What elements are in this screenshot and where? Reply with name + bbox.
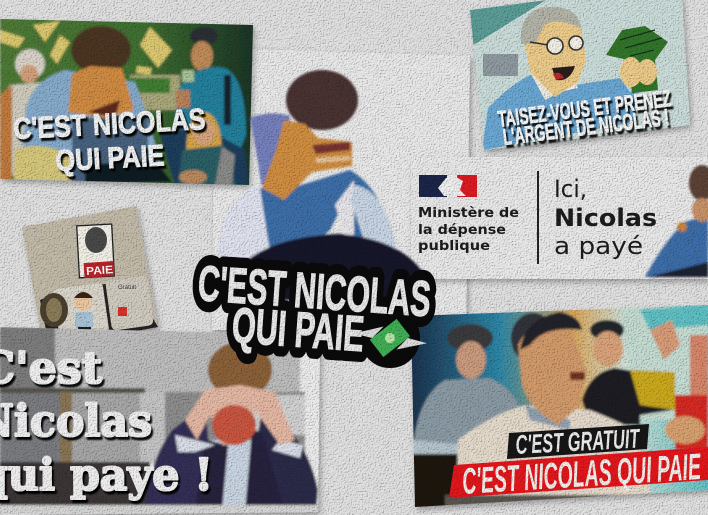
central man xyxy=(455,404,652,497)
ministry name xyxy=(418,205,519,254)
cartoon mascot xyxy=(74,292,93,330)
sticker text: C'EST NICOLAS xyxy=(196,255,433,327)
sticker text xyxy=(196,255,433,362)
money in hand xyxy=(606,26,668,93)
sticker: c'est nicolas qui paie xyxy=(196,255,433,375)
slogan xyxy=(554,175,657,260)
icon: mug label xyxy=(77,224,115,278)
icon: French republic flag xyxy=(419,175,477,197)
worried man xyxy=(447,324,493,352)
banknotes xyxy=(0,21,172,75)
panel: mugs photo xyxy=(22,206,162,331)
mug logo: Gratuit xyxy=(118,285,136,291)
sticker outline xyxy=(196,255,433,362)
bottom strip xyxy=(443,493,642,506)
mug logo xyxy=(118,285,136,316)
headline xyxy=(13,103,206,178)
desk items xyxy=(0,505,320,515)
ministry name: la dépense xyxy=(418,222,506,238)
panel: photo of crowd and banknotes xyxy=(0,15,256,190)
sticker outline: C'EST NICOLAS xyxy=(196,255,433,327)
icon: flying banknote xyxy=(354,302,427,375)
sleeves xyxy=(175,435,215,452)
headline: QUI PAIE xyxy=(55,139,165,178)
panel: central sheet xyxy=(212,48,470,330)
man hands on head xyxy=(20,70,165,185)
small man xyxy=(645,165,708,277)
icon: mug label: PAIE xyxy=(86,264,114,278)
man in teal xyxy=(190,27,218,45)
panel: young men thumbnail xyxy=(408,300,708,510)
face and hands xyxy=(208,342,272,398)
sweater xyxy=(482,75,640,150)
panel: man at desk, grey wall xyxy=(0,325,325,515)
panel: cartoon angry man xyxy=(465,0,695,155)
label: c'est gratuit xyxy=(507,423,649,460)
panel: central man with head in hands xyxy=(212,70,430,300)
panel: ministry card xyxy=(411,157,708,279)
right side hand and red cup xyxy=(650,320,680,360)
blonde woman xyxy=(186,112,222,155)
headline xyxy=(0,343,213,501)
ministry name: Ministère de xyxy=(418,205,519,221)
sticker text: QUI PAIE xyxy=(230,297,366,362)
slogan: a payé xyxy=(554,232,643,260)
man in yellow jacket xyxy=(590,320,624,340)
suit xyxy=(144,420,210,506)
sticker outline: QUI PAIE xyxy=(230,297,366,362)
head xyxy=(524,7,586,97)
headline: C'EST NICOLAS xyxy=(13,103,206,146)
ministry name: publique xyxy=(418,238,490,254)
slogan: Nicolas xyxy=(554,204,657,232)
slogan: Ici, xyxy=(554,175,587,203)
grandmother xyxy=(15,49,45,79)
